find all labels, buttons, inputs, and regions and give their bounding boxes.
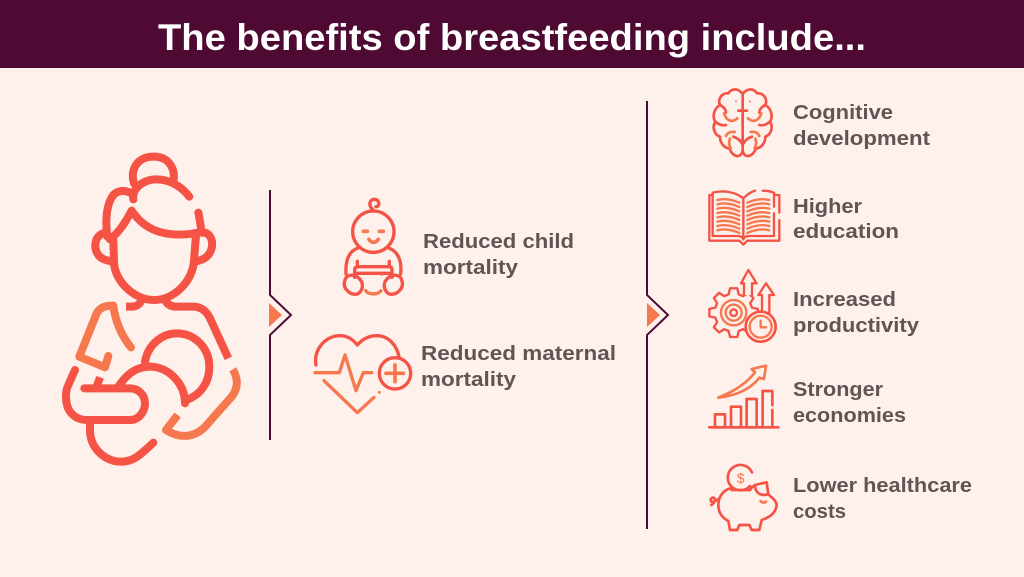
label: lower healthcare costs: costs xyxy=(793,500,846,523)
icon: gear, clock and up arrows xyxy=(709,270,776,342)
label: stronger economies xyxy=(793,378,906,427)
title banner: The benefits of breastfeeding include... xyxy=(158,17,866,58)
icon: open book xyxy=(709,191,779,245)
label: reduced child mortality: mortality xyxy=(423,256,519,279)
label: increased productivity xyxy=(793,288,920,337)
icon: rising bar chart xyxy=(709,366,778,427)
label: higher education: Higher xyxy=(793,195,862,218)
label: stronger economies: economies xyxy=(793,404,906,427)
label: stronger economies: Stronger xyxy=(793,378,883,401)
label: cognitive development xyxy=(793,101,930,150)
label: increased productivity: Increased xyxy=(793,288,896,311)
icon: brain xyxy=(714,89,772,156)
icon: baby xyxy=(344,199,402,294)
right divider with arrow notch xyxy=(647,101,668,529)
icon: piggy bank with coin xyxy=(711,465,777,530)
label: reduced maternal mortality: Reduced maternal xyxy=(421,342,616,365)
title banner xyxy=(0,0,1024,68)
label: reduced child mortality xyxy=(423,230,574,279)
left divider with arrow notch xyxy=(269,190,291,440)
label: lower healthcare costs: Lower healthcare xyxy=(793,474,972,497)
label: higher education: education xyxy=(793,220,899,243)
label: reduced child mortality: Reduced child xyxy=(423,230,574,253)
label: lower healthcare costs xyxy=(793,474,972,523)
label: increased productivity: productivity xyxy=(793,314,920,337)
icon: piggy bank with coin: $ xyxy=(737,470,745,486)
label: cognitive development: development xyxy=(793,127,930,150)
label: higher education xyxy=(793,195,899,243)
label: cognitive development: Cognitive xyxy=(793,101,893,124)
label: reduced maternal mortality: mortality xyxy=(421,368,517,391)
icon: mother holding baby xyxy=(66,157,237,462)
label: reduced maternal mortality xyxy=(421,342,616,391)
icon: heart with pulse and plus xyxy=(315,336,411,413)
